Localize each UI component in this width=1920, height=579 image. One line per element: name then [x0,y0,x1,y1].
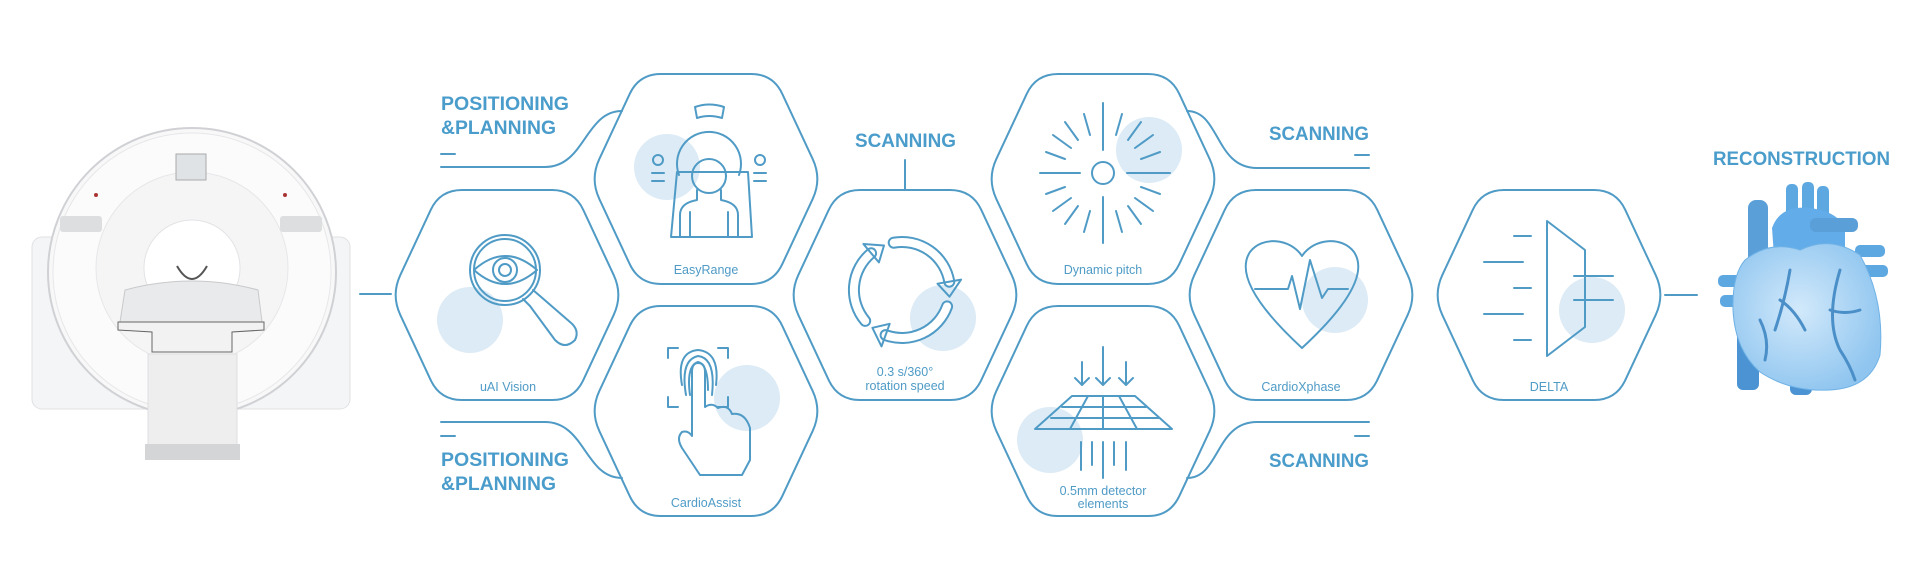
icon: finger touch fingerprint [668,348,750,475]
heading: positioning & planning (bottom) [441,422,622,495]
panel: CardioXphase [1190,190,1412,400]
panel: 0.5mm detector elements: elements [1078,497,1128,511]
panel: rotation speed: 0.3 s/360° [877,365,933,379]
panel: EasyRange [595,74,817,284]
panel: uAI Vision [396,190,618,400]
connector line: scanner to uAI Vision [360,293,391,295]
icon: heart with ECG [1246,241,1358,348]
heading: scanning (bottom right): SCANNING [1269,451,1369,472]
heading: scanning (middle): SCANNING [855,131,956,152]
icon: DELTA reconstruction [1484,221,1613,356]
panel: CardioXphase: CardioXphase [1261,380,1341,394]
icon: magnifier with eye [470,235,577,345]
icon: patient positioning [652,104,766,237]
icon: dynamic pitch burst [1040,103,1170,243]
panel: 0.5mm detector elements: 0.5mm detector [1060,484,1146,498]
panel: Dynamic pitch [992,74,1214,284]
icon: rotation arrows [854,242,961,346]
heading: positioning & planning (top): POSITIONING [441,94,569,115]
heading: scanning (middle) [855,131,956,190]
panel: CardioAssist: CardioAssist [671,496,742,510]
heading: positioning & planning (bottom): &PLANNING [441,474,556,495]
heading: reconstruction: RECONSTRUCTION [1713,149,1890,170]
panel: DELTA [1438,190,1660,400]
icon: detector grid with arrows [1035,347,1172,478]
panel: uAI Vision: uAI Vision [480,380,536,394]
heading: scanning (top right) [1187,111,1369,168]
heading: positioning & planning (bottom): POSITIONING [441,450,569,471]
connector line: DELTA to heart [1665,294,1697,296]
icon: anatomical heart [1718,182,1888,395]
heading: scanning (bottom right) [1187,422,1369,478]
panel: rotation speed: rotation speed [865,379,945,393]
heading: scanning (top right): SCANNING [1269,124,1369,145]
CT scanner image [32,128,350,460]
panel: 0.5mm detector elements [992,306,1214,516]
panel: DELTA: DELTA [1530,380,1569,394]
panel: Dynamic pitch: Dynamic pitch [1064,263,1142,277]
heading: positioning & planning (top) [441,94,622,167]
panel: rotation speed [794,190,1016,400]
heading: positioning & planning (top): &PLANNING [441,118,556,139]
panel: CardioAssist [595,306,817,516]
panel: EasyRange: EasyRange [674,263,738,277]
